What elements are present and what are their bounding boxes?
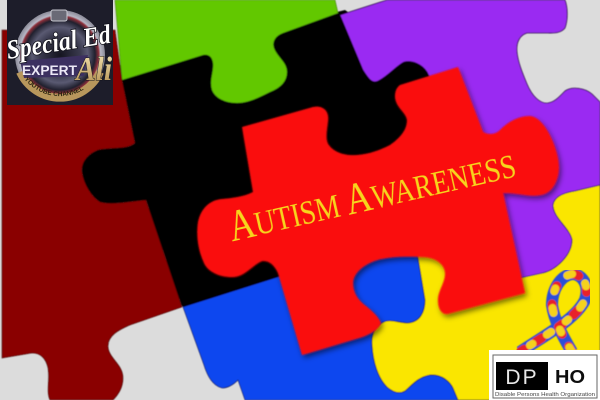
logo: Special Ed Expert Ali [4,0,113,105]
DPHO letters HO: HO [555,367,585,387]
piece: black centre [60,10,430,310]
DPHO letters DP: DP [505,366,539,389]
DPHO black box [496,362,548,390]
piece: blue [183,250,458,400]
logo text: Ali: Ali [74,51,112,88]
piece: dark red [2,30,182,400]
logo band behind Expert [20,55,88,78]
DPHO caption: Disable Persons Health Organization [495,392,595,398]
logo play badge [51,10,67,21]
logo text: YouTube Channel: YOUTUBE CHANNEL [26,76,84,96]
DPHO white panel [489,350,600,400]
title: Autism Awareness: AUTISM AWARENESS [223,138,520,251]
icon: autism puzzle ribbon [520,274,587,352]
piece: red foreground [197,67,559,355]
logo: DPHO [489,350,600,400]
logo text: Expert: EXPERT [22,62,77,78]
logo gold lower ring [20,72,100,98]
logo text: Special Ed: Special Ed [4,19,113,65]
logo medallion [15,10,105,100]
piece: yellow [372,185,600,400]
piece: green [115,0,338,103]
piece: purple [340,0,600,278]
logo background [7,0,113,105]
DPHO border [493,355,597,398]
